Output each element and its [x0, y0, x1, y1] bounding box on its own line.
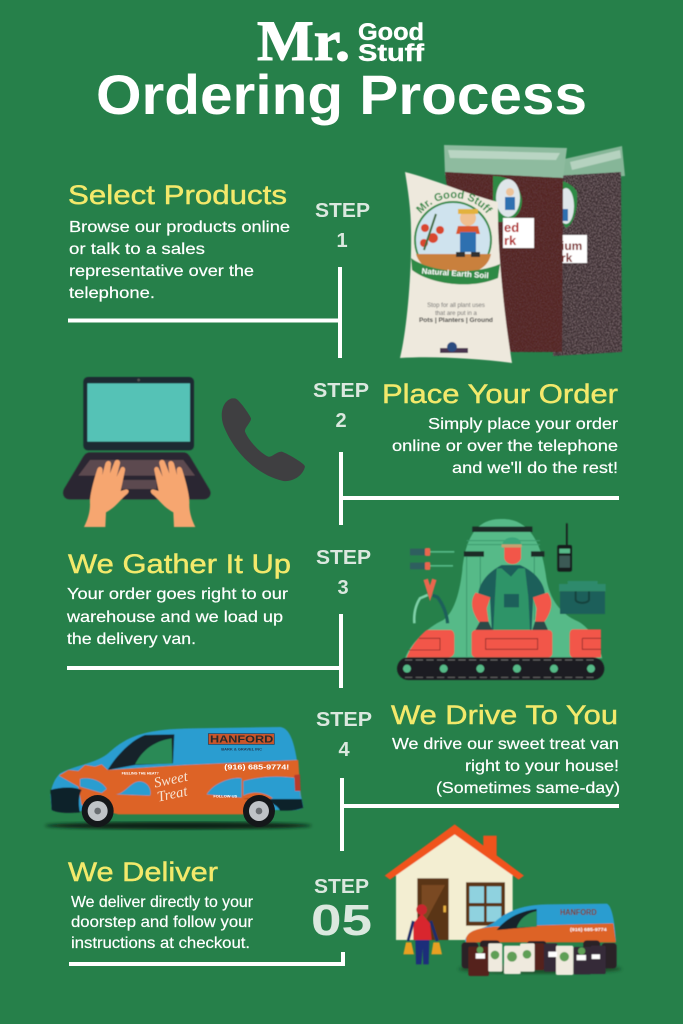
soil bag: Mr. Good Stuff — [416, 190, 494, 214]
laptop base — [63, 452, 210, 499]
hands — [84, 460, 195, 527]
soil bag: that are put in a — [435, 311, 478, 317]
icon: laptop with typing hands — [63, 377, 210, 527]
van body — [50, 727, 303, 814]
pliers — [414, 579, 448, 623]
step 2 badge: 2 — [335, 410, 347, 432]
walkie talkie — [557, 523, 572, 572]
step 5 panel — [68, 857, 372, 966]
icon: telephone — [222, 398, 305, 481]
red bark bag: rk — [504, 233, 517, 248]
step 1 text — [69, 219, 290, 302]
step 2 text: and we'll do the rest! — [452, 460, 618, 477]
icon: warehouse worker on conveyor — [397, 519, 606, 680]
step 2 text: online or over the telephone — [392, 438, 618, 455]
icon: product bags — [399, 144, 626, 364]
step 4 badge: 4 — [338, 739, 350, 761]
step 4 badge — [316, 709, 372, 761]
laptop screen — [83, 377, 194, 450]
step 4 text: right to your house! — [465, 758, 619, 775]
conveyor boxes — [407, 629, 601, 657]
step 1 panel — [68, 180, 370, 358]
machine silhouette — [405, 519, 602, 658]
step 5 badge — [311, 876, 372, 945]
step 5 text: We deliver directly to your — [71, 894, 254, 911]
step 4 badge: STEP — [316, 709, 372, 731]
step 3 heading: We Gather It Up — [68, 549, 291, 579]
step 3 connector — [67, 614, 342, 688]
step 3 text: Your order goes right to our — [67, 586, 289, 603]
step 4 text: (Sometimes same-day) — [436, 780, 620, 797]
worker — [472, 537, 551, 631]
logo: Mr. — [257, 10, 350, 73]
step 3 badge: 3 — [337, 577, 349, 599]
step 4 text — [392, 736, 620, 797]
van shadow — [45, 822, 312, 829]
step 5 badge: 05 — [311, 896, 372, 945]
step 3 badge — [316, 547, 371, 599]
icon: delivery van — [45, 727, 312, 829]
medium bark bag — [553, 146, 625, 356]
step 1 text: Browse our products online — [69, 219, 290, 236]
toolbox — [559, 581, 606, 614]
step 2 text — [392, 416, 619, 477]
van lettering: HANFORD — [210, 735, 273, 746]
step 1 heading: Select Products — [68, 180, 287, 210]
step 5 text — [71, 894, 254, 952]
step 1 badge: 1 — [336, 230, 348, 252]
step 2 heading: Place Your Order — [382, 379, 618, 409]
soil bag — [399, 172, 513, 364]
logo: Stuff — [358, 40, 425, 67]
house — [385, 824, 524, 940]
step 3 text — [66, 586, 289, 648]
step 5 text: instructions at checkout. — [71, 935, 250, 952]
red bark bag: ed — [504, 220, 519, 235]
step 3 text: the delivery van. — [67, 631, 196, 648]
step 2 badge: STEP — [313, 380, 369, 402]
van lettering: Treat — [156, 783, 190, 806]
medium bark bag: ium — [561, 239, 582, 253]
step 1 badge — [315, 200, 370, 252]
logo: Good — [358, 19, 424, 46]
logo — [257, 10, 425, 73]
van lettering: Sweet — [152, 769, 190, 792]
step 1 text: or talk to a sales — [69, 241, 205, 258]
soil bag: Natural Earth Soil — [421, 267, 489, 280]
stacked product bags — [458, 940, 622, 976]
step 4 text: We drive our sweet treat van — [392, 736, 619, 753]
step 3 panel — [66, 547, 371, 688]
step 5 connector — [69, 952, 345, 966]
step 2 panel — [313, 379, 619, 525]
step 1 badge: STEP — [315, 200, 370, 222]
van lettering: FEELING THE HEAT? — [122, 771, 160, 775]
soil bag: Stop for all plant uses — [427, 303, 485, 309]
van lettering — [122, 734, 289, 806]
step 2 text: Simply place your order — [428, 416, 619, 433]
step 2 connector — [341, 452, 619, 525]
step 4 connector — [342, 778, 619, 851]
step 3 text: warehouse and we load up — [66, 609, 283, 626]
step 5 text: doorstep and follow your — [71, 914, 254, 931]
small van — [465, 904, 616, 942]
soil bag: Pots | Planters | Ground — [419, 317, 493, 324]
delivery person — [403, 904, 442, 964]
title: Ordering Process — [96, 63, 587, 126]
step 1 connector — [68, 267, 340, 358]
step 4 panel — [316, 700, 620, 851]
conveyor belt — [397, 657, 604, 680]
machine details — [464, 527, 544, 657]
red bark bag — [444, 145, 567, 352]
small van: HANFORD — [560, 908, 597, 917]
step 4 heading: We Drive To You — [391, 700, 618, 730]
medium bark bag: rk — [561, 251, 573, 265]
step 3 badge: STEP — [316, 547, 371, 569]
step 5 heading: We Deliver — [68, 857, 218, 887]
step 2 badge — [313, 380, 369, 432]
step 5 badge: STEP — [314, 876, 369, 898]
screwdrivers — [410, 548, 454, 570]
van lettering: (916) 685-9774! — [224, 764, 289, 771]
van lettering: BARK & GRAVEL INC — [221, 746, 262, 751]
icon: house with delivery — [385, 824, 622, 976]
step 1 text: telephone. — [69, 285, 155, 302]
small van: (916) 685-9774 — [570, 927, 607, 932]
step 1 text: representative over the — [69, 263, 254, 280]
van lettering: FOLLOW US — [213, 794, 238, 799]
van wheels — [82, 795, 275, 827]
